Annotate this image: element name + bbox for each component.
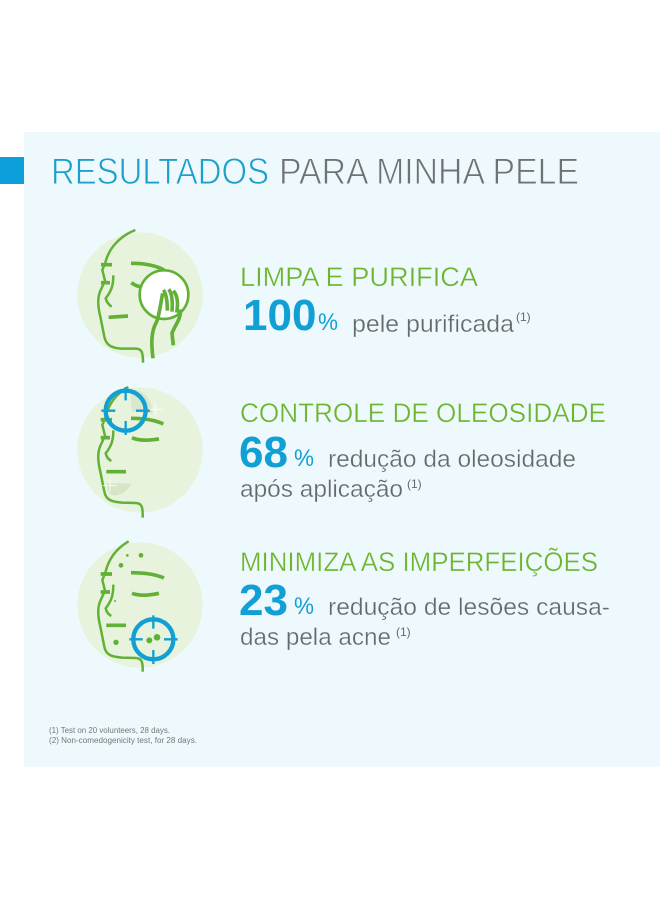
panel row 2 text: [239, 398, 606, 503]
background panel: [24, 132, 660, 767]
reference mark: (1): [516, 310, 531, 324]
reference mark: (1): [407, 477, 422, 491]
description line 1: redução de lesões causa-: [328, 594, 610, 621]
percent sign: %: [318, 309, 338, 336]
reference mark: (1): [396, 625, 411, 639]
title: PARA MINHA PELE: [279, 151, 579, 192]
heading: minimizes imperfections: MINIMIZA AS IMPERFEIÇÕES: [240, 546, 598, 577]
blue accent square: [0, 157, 24, 184]
heading: oil control: CONTROLE DE OLEOSIDADE: [240, 398, 606, 428]
panel row 3 text: [239, 546, 610, 651]
stat: 68 percent: 68: [239, 428, 288, 477]
heading: cleans and purifies: LIMPA E PURIFICA: [240, 262, 478, 292]
footnotes: (2) Non-comedogenicity test, for 28 days.: [49, 736, 197, 745]
stat: 100 percent: 100: [243, 291, 316, 340]
icon: face with target on chin: [77, 541, 203, 672]
percent sign: %: [294, 445, 314, 472]
footnotes: [49, 726, 197, 745]
panel row 1 text: [240, 262, 531, 340]
description line 1: redução da oleosidade: [328, 446, 576, 473]
description line 2: após aplicação: [240, 476, 403, 503]
icon: face with cleansing pad: [77, 230, 203, 363]
stat: 23 percent: 23: [239, 576, 288, 625]
icon: face with target on forehead: [77, 387, 203, 518]
percent sign: %: [294, 593, 314, 620]
footnotes: (1) Test on 20 volunteers, 28 days.: [49, 726, 170, 735]
title: RESULTADOS: [51, 151, 269, 192]
title: [51, 151, 579, 192]
description: pele purificada: [352, 311, 515, 338]
description line 2: das pela acne: [240, 624, 391, 651]
